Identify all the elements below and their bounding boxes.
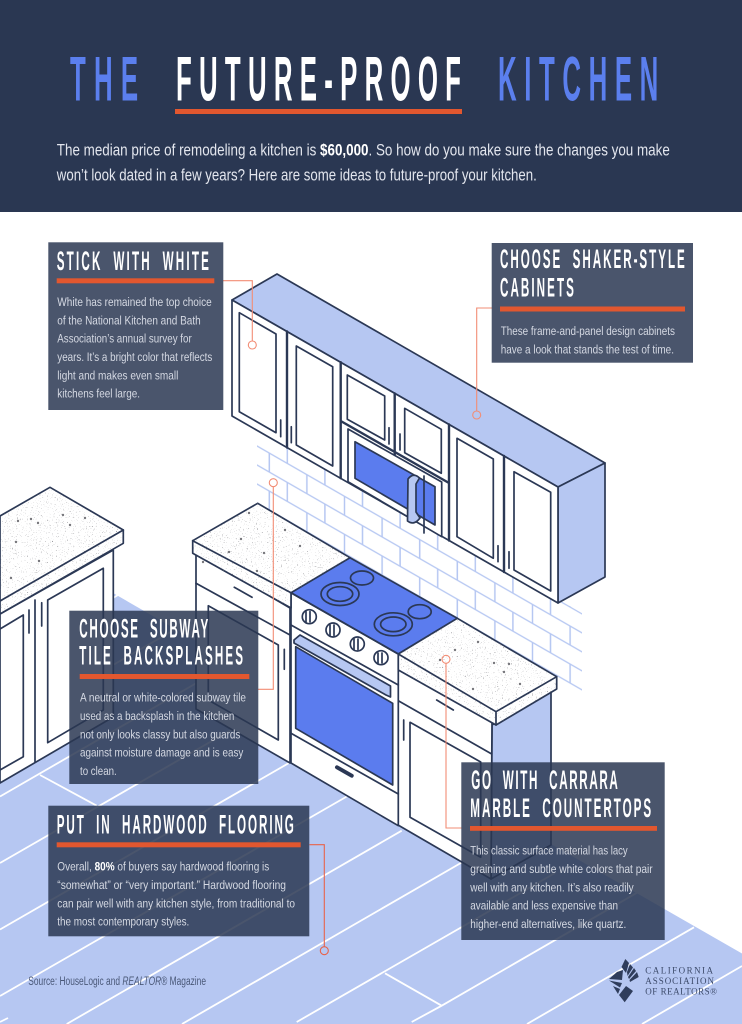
heading: CHOOSE SUBWAY (79, 614, 208, 644)
intro text: The median price of remodeling a kitchen is $60,000. So how do you make sure the changes you make (57, 141, 670, 160)
left base cabinet and counter (0, 485, 125, 783)
center base cabinet (196, 553, 290, 763)
countertops (190, 500, 559, 727)
title: KITCHEN (498, 44, 658, 115)
body text: available and less expensive than (470, 899, 618, 913)
source note: Source: HouseLogic and REALTOR® Magazine (28, 976, 206, 988)
heading: CHOOSE SHAKER-STYLE (500, 245, 685, 274)
stove and oven (291, 558, 457, 826)
cabinet top face (232, 274, 605, 487)
body text: Association’s annual survey for (57, 332, 192, 346)
heading (470, 766, 651, 823)
body text (80, 691, 246, 778)
leader: carrara marble (442, 655, 462, 828)
heading: PUT IN HARDWOOD FLOORING (57, 810, 294, 840)
right base cabinet (398, 665, 551, 879)
countertop: left of stove (193, 503, 350, 608)
blue cabinet side (491, 690, 551, 879)
logo text: OF REALTORS® (645, 987, 717, 997)
counter top (0, 487, 123, 614)
panel: hardwood flooring (48, 806, 309, 936)
header band (0, 0, 742, 212)
body text (57, 295, 212, 401)
heading: CABINETS (500, 273, 574, 303)
upper cabinets (232, 274, 605, 603)
leader: stick with white (223, 281, 256, 349)
intro text: won’t look dated in a few years? Here are some ideas to future-proof your kitchen. (56, 166, 537, 185)
heading: MARBLE COUNTERTOPS (470, 794, 651, 823)
leader: subway tile (258, 479, 277, 689)
body text: the most contemporary styles. (57, 915, 189, 929)
logo text: CALIFORNIA (645, 965, 714, 975)
body text: not only looks classy but also guards (80, 727, 240, 741)
leader: hardwood flooring (310, 845, 328, 955)
microwave (348, 429, 442, 537)
title (70, 44, 658, 115)
panel: stick with white (48, 242, 223, 410)
body text (57, 860, 295, 929)
panel: subway tile (69, 611, 258, 784)
body text: White has remained the top choice (57, 295, 212, 309)
logo text: ASSOCIATION (645, 976, 714, 986)
heading (79, 614, 243, 671)
heading: TILE BACKSPLASHES (79, 641, 243, 671)
body text: “somewhat” or “very important.” Hardwood flooring (57, 878, 286, 892)
drawer handle (337, 767, 352, 776)
body text: of the National Kitchen and Bath (57, 313, 201, 327)
body text (469, 844, 653, 931)
floor (0, 592, 742, 1024)
body text: can pair well with any kitchen style, from traditional to (57, 896, 295, 910)
body text: A neutral or white-colored subway tile (80, 691, 246, 705)
logo text (645, 965, 717, 997)
body text: used as a backsplash in the kitchen (80, 709, 234, 723)
knobs (302, 610, 388, 665)
body text: well with any kitchen. It’s also readily (469, 880, 634, 894)
heading: GO WITH CARRARA (471, 766, 618, 795)
subway tile backsplash (257, 426, 582, 692)
burners (321, 571, 431, 636)
heading: STICK WITH WHITE (57, 247, 209, 276)
cabinet front (232, 300, 558, 603)
body text: These frame-and-panel design cabinets (501, 324, 675, 338)
countertop: right of stove (398, 618, 557, 725)
icon: logo mark (609, 959, 639, 1002)
title: THE (70, 44, 138, 115)
cabinet doors (239, 313, 551, 591)
body text: years. It’s a bright color that reflects (57, 350, 212, 364)
body text: to clean. (80, 764, 117, 778)
body text: have a look that stands the test of time. (501, 342, 674, 356)
oven handle (294, 635, 390, 697)
logo (609, 959, 717, 1002)
body text: higher-end alternatives, like quartz. (470, 917, 626, 931)
body text: This classic surface material has lacy (470, 844, 628, 858)
body text: Overall, 80% of buyers say hardwood flooring is (57, 860, 269, 874)
intro text (56, 141, 670, 185)
door dividers (287, 332, 504, 572)
oven window (296, 647, 393, 785)
body text: against moisture damage and is easy (80, 746, 244, 760)
body text: light and makes even small (57, 368, 178, 382)
cabinet side face (558, 463, 605, 603)
title: FUTURE-PROOF (176, 44, 461, 115)
body text: kitchens feel large. (57, 387, 140, 401)
panel: shaker cabinets (492, 243, 693, 363)
body text: graining and subtle white colors that pair (470, 862, 653, 876)
panel: carrara marble (461, 762, 665, 940)
body text (501, 324, 675, 356)
leader: shaker cabinets (473, 308, 492, 419)
cooktop (291, 558, 457, 654)
heading (500, 245, 685, 303)
